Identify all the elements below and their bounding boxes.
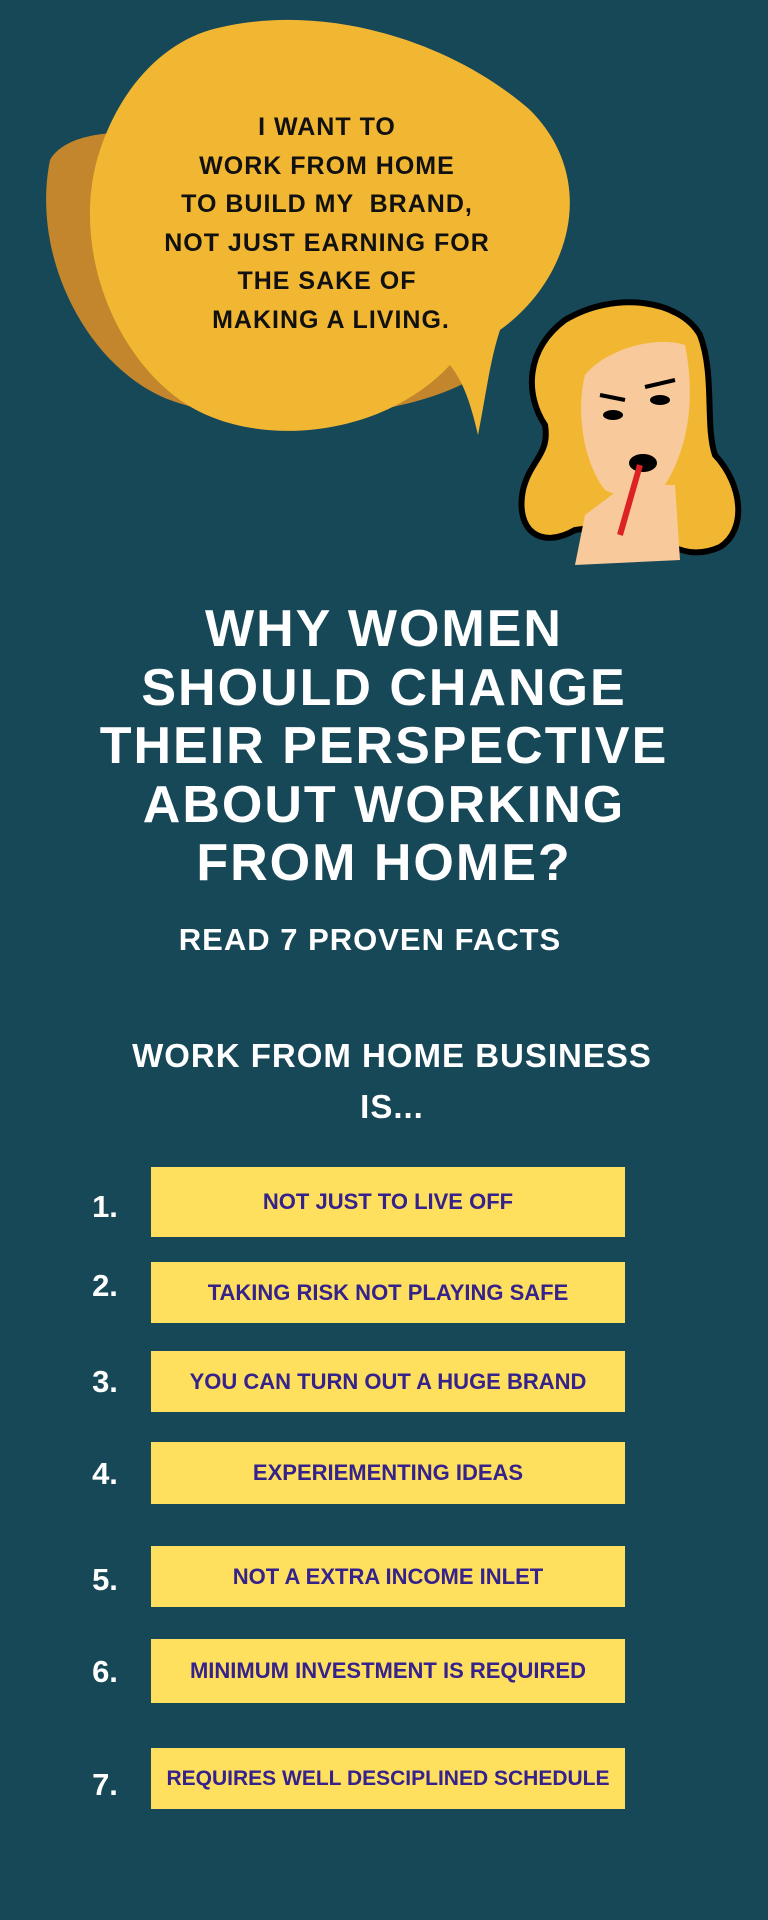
bubble text: TO BUILD MY BRAND,	[181, 190, 473, 218]
title: FROM HOME?	[196, 834, 572, 892]
number 4: 4.	[92, 1456, 118, 1491]
title: THEIR PERSPECTIVE	[100, 717, 668, 775]
bubble text: NOT JUST EARNING FOR	[164, 228, 490, 256]
bubble text: MAKING A LIVING.	[212, 306, 450, 334]
box 2	[151, 1262, 625, 1323]
number 2: 2.	[92, 1268, 118, 1303]
number 6: 6.	[92, 1654, 118, 1689]
bubble text: I WANT TO	[258, 113, 396, 141]
section heading: IS...	[360, 1088, 424, 1125]
number 7: 7.	[92, 1767, 118, 1802]
bubble text	[164, 113, 490, 334]
box 3	[151, 1351, 625, 1412]
box 2: TAKING RISK NOT PLAYING SAFE	[208, 1280, 568, 1304]
box 3: YOU CAN TURN OUT A HUGE BRAND	[190, 1368, 586, 1394]
box 6: MINIMUM INVESTMENT IS REQUIRED	[190, 1658, 586, 1683]
bubble text: WORK FROM HOME	[199, 152, 455, 180]
title	[100, 600, 668, 892]
bubble text: THE SAKE OF	[237, 267, 417, 295]
bubble shadow	[46, 133, 470, 417]
number 3: 3.	[92, 1364, 118, 1399]
title: SHOULD CHANGE	[141, 658, 627, 716]
box 6	[151, 1639, 625, 1703]
box 1	[151, 1167, 625, 1237]
box 4	[151, 1442, 625, 1504]
section heading	[132, 1037, 652, 1125]
bubble front	[90, 20, 570, 435]
section heading: WORK FROM HOME BUSINESS	[132, 1037, 652, 1074]
box 5: NOT A EXTRA INCOME INLET	[233, 1564, 543, 1588]
title: ABOUT WORKING	[143, 776, 625, 834]
speech bubble	[46, 20, 570, 435]
box 7: REQUIRES WELL DESCIPLINED SCHEDULE	[166, 1766, 610, 1790]
box 1: NOT JUST TO LIVE OFF	[263, 1189, 513, 1214]
subtitle: READ 7 PROVEN FACTS	[179, 922, 561, 957]
illustration: woman	[518, 299, 742, 565]
title: WHY WOMEN	[205, 600, 563, 658]
number 1: 1.	[92, 1189, 118, 1224]
box 7	[151, 1748, 625, 1809]
box 5	[151, 1546, 625, 1607]
number 5: 5.	[92, 1562, 118, 1597]
box 4: EXPERIEMENTING IDEAS	[253, 1460, 523, 1485]
